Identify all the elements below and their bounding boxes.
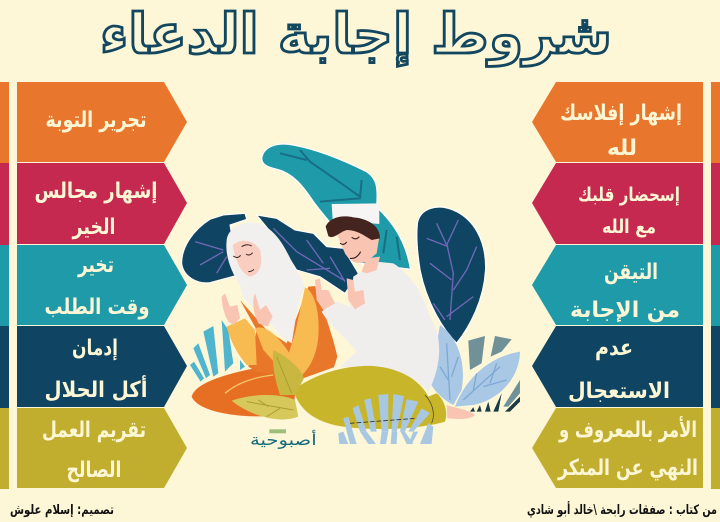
orange dress (240, 286, 337, 378)
footer: designer credit: تصميم: إسلام علوش (10, 503, 114, 518)
white robe (322, 262, 439, 392)
man olive trousers (293, 366, 446, 429)
panel: right teal (532, 245, 703, 325)
panel: right crimson: مع الله (602, 216, 656, 238)
panel: right navy: عدم (595, 336, 633, 361)
panel: right crimson: إسحضار قلبك (578, 184, 680, 206)
panel: right orange (532, 82, 703, 162)
panel: right orange: لله (607, 136, 637, 161)
white cap (332, 203, 379, 224)
panel: left crimson: إشهار مجالس (34, 179, 158, 204)
icon: right navy leaf (417, 207, 486, 343)
panel: left teal (17, 245, 187, 325)
foot (447, 405, 475, 419)
panel: left teal: تخير (77, 253, 114, 278)
praying hands (315, 278, 335, 310)
icon: olive leaves front (232, 350, 304, 419)
yellow sleeves and blouse (287, 287, 319, 375)
panel: right teal: التيقن (604, 260, 658, 285)
panel: left navy: إدمان (72, 336, 118, 361)
icon: pale blue striped fan bottom (338, 394, 433, 444)
face (233, 241, 261, 277)
panel: left navy (17, 326, 187, 407)
icon: man (293, 203, 475, 429)
logo: Osbouhiya: أصبوحية (250, 430, 317, 449)
icon: grey-green striped fan right (468, 336, 520, 412)
panel: right crimson (532, 163, 703, 244)
panel: right orange: إشهار إفلاسك (560, 101, 682, 126)
panel: left orange (17, 82, 187, 162)
panel: right navy: الاستعجال (568, 379, 670, 404)
icon: blue striped fan left (190, 320, 245, 382)
title: شروط إجابة الدعاء (100, 3, 612, 67)
panel: left olive: الصالح (66, 458, 122, 483)
hair (326, 216, 380, 240)
right edge colour strip (711, 82, 720, 489)
panel: right olive (532, 408, 703, 488)
icon: left navy leaf (182, 213, 358, 293)
panel: left teal: وقت الطلب (44, 295, 150, 320)
panel: left crimson (17, 163, 187, 244)
praying hands (222, 293, 240, 325)
neck and face (362, 257, 380, 273)
left edge colour strip (0, 82, 9, 489)
panel: left olive (17, 408, 187, 488)
illustration: couple making supplication among leaves (182, 144, 520, 449)
orange skirt (192, 365, 297, 416)
icon: woman (192, 222, 337, 416)
icon: pale blue leaves right (431, 325, 520, 407)
panel: right navy (532, 326, 703, 407)
panel: left olive: تقريم العمل (42, 418, 146, 443)
hijab (226, 222, 304, 343)
panel: left crimson: الخير (72, 215, 116, 240)
icon: large teal leaf (262, 144, 411, 269)
panel: left navy: أكل الحلال (44, 374, 148, 403)
panel: left orange: تجرير التوبة (46, 108, 146, 133)
panel: right teal: من الإجابة (570, 298, 680, 323)
